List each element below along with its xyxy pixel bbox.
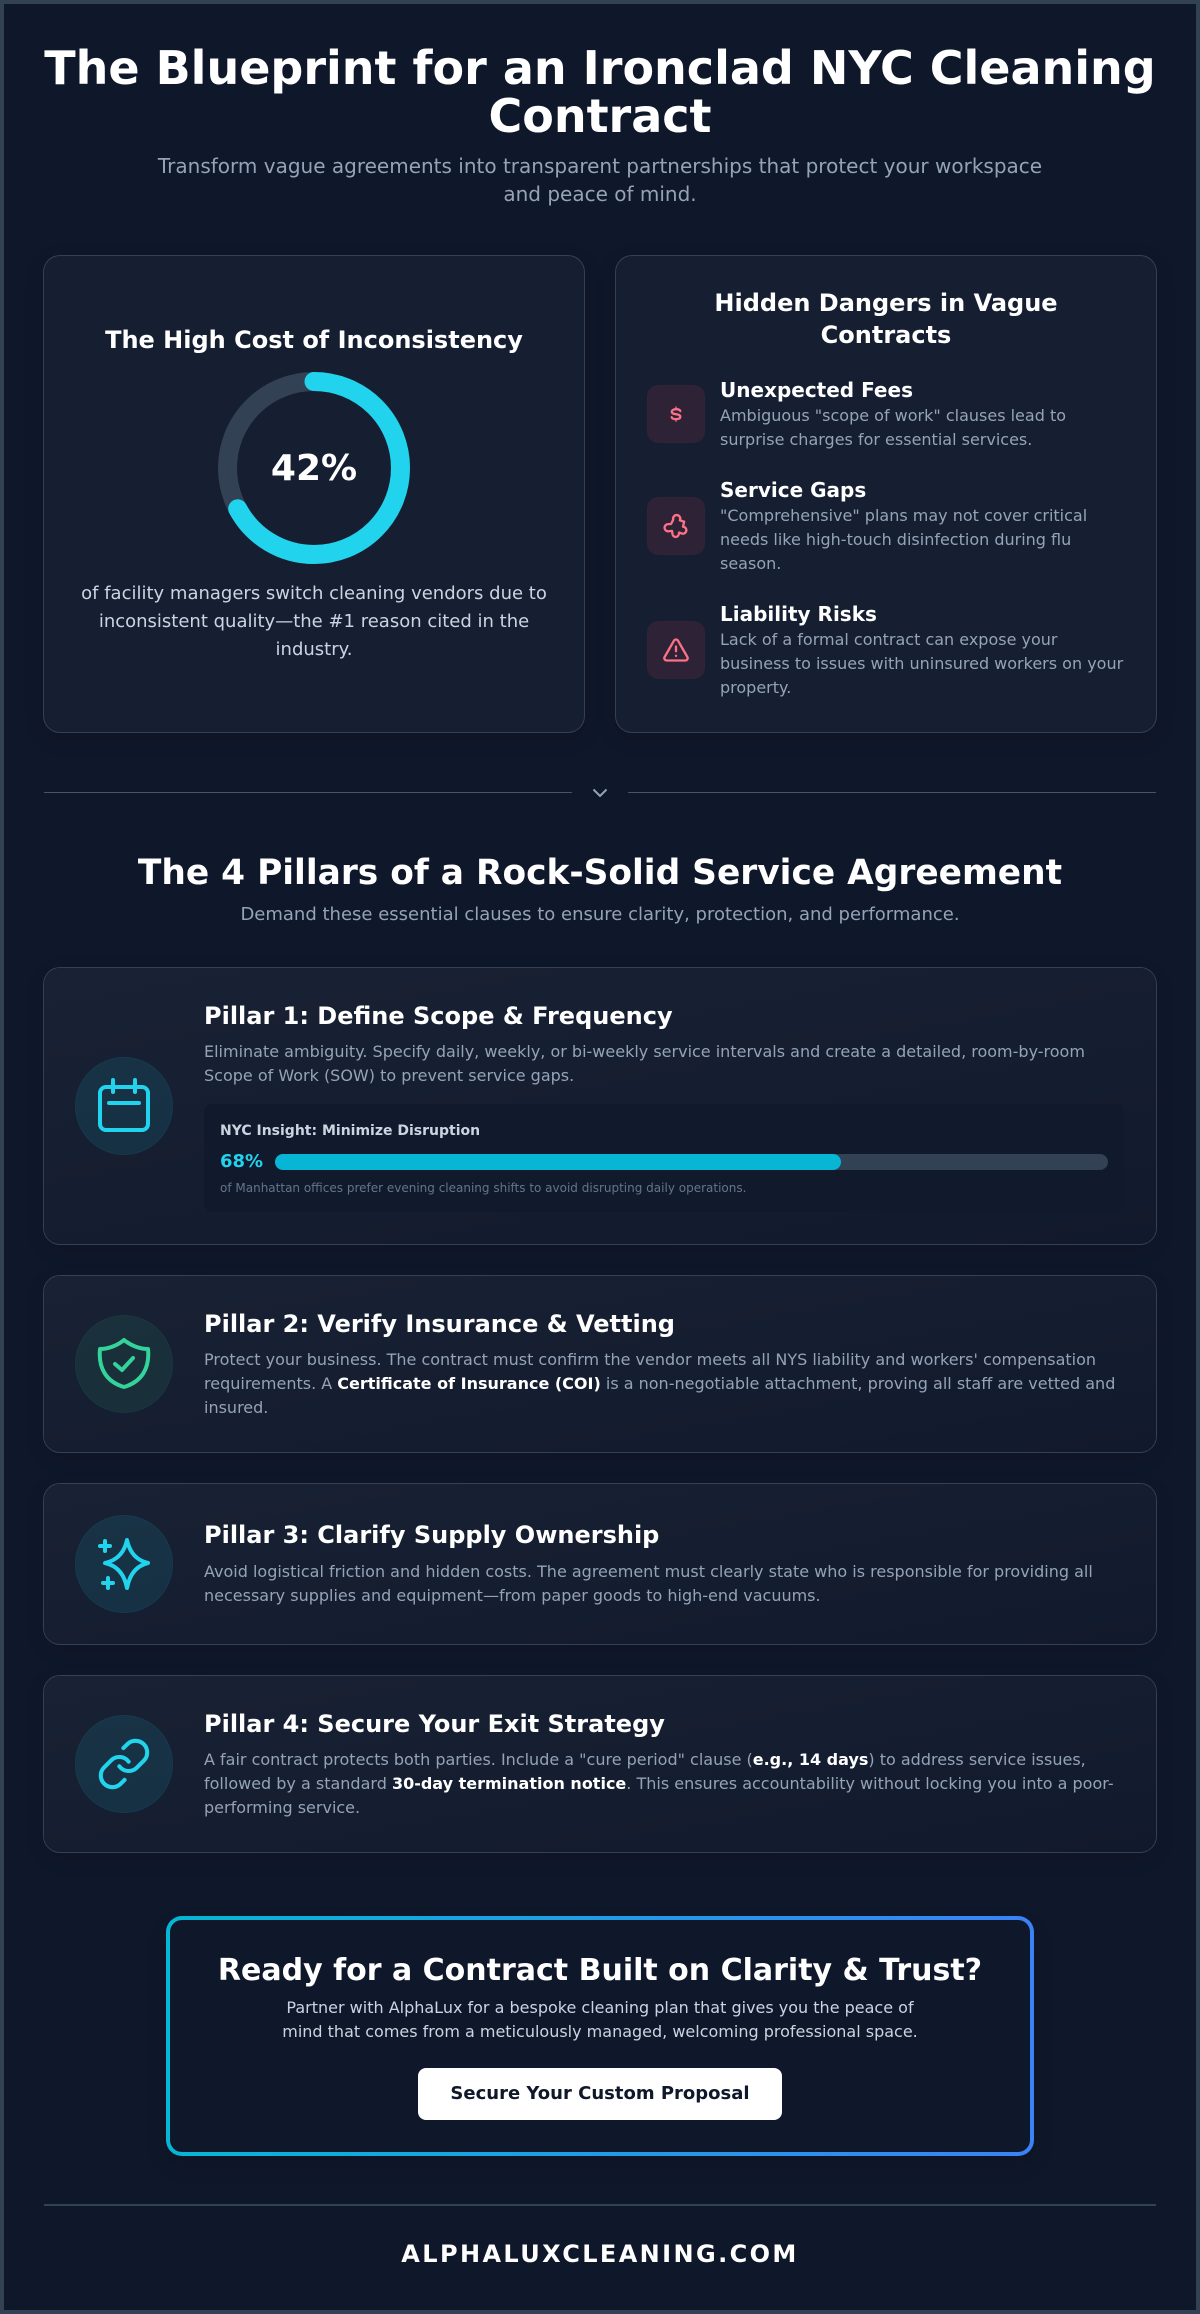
danger text: liability risks — [720, 630, 1124, 697]
title: The Blueprint for an Ironclad NYC Cleaning — [44, 41, 1156, 95]
stat description — [81, 583, 547, 660]
cta button — [418, 2068, 782, 2120]
pillar 2 heading: Pillar 2: Verify Insurance & Vetting — [204, 1310, 675, 1338]
heading: hidden dangers: Contracts — [821, 321, 951, 349]
stat description: inconsistent quality—the #1 reason cited in the — [99, 611, 529, 632]
heading: hidden dangers — [714, 289, 1058, 349]
pillar 4 text: followed by a standard 30-day termination notice. This ensures accountability without locking you into a poor- — [204, 1774, 1114, 1793]
pillar 2 text: insured. — [204, 1398, 268, 1417]
danger text: unexpected fees: Ambiguous "scope of work" clauses lead to — [720, 406, 1066, 425]
panel: pillar 3 — [44, 1484, 1156, 1644]
subtitle: Transform vague agreements into transparent partnerships that protect your workspace — [158, 154, 1042, 178]
donut chart: 42%: 42% — [271, 448, 357, 489]
danger: unexpected fees: Unexpected Fees — [720, 378, 913, 402]
icon: puzzle — [647, 497, 705, 555]
icon: link — [75, 1715, 173, 1813]
icon: dollar — [647, 385, 705, 443]
stat description: of facility managers switch cleaning vendors due to — [81, 583, 547, 604]
title: Contract — [488, 89, 712, 143]
cta text: Partner with AlphaLux for a bespoke cleaning plan that gives you the peace of — [286, 1998, 914, 2017]
danger text: service gaps: needs like high-touch disinfection during flu — [720, 530, 1071, 549]
danger text: service gaps: "Comprehensive" plans may not cover critical — [720, 506, 1087, 525]
panel: hidden dangers — [616, 256, 1156, 732]
icon: warning triangle — [647, 621, 705, 679]
panel: pillar 4 — [44, 1676, 1156, 1852]
pillar 1 heading: Pillar 1: Define Scope & Frequency — [204, 1002, 673, 1030]
panel: pillar 2 — [44, 1276, 1156, 1452]
pillar 3 text — [204, 1562, 1093, 1605]
pillar 1 text — [204, 1042, 1085, 1085]
subtitle — [158, 154, 1042, 206]
danger text: liability risks: Lack of a formal contract can expose your — [720, 630, 1058, 649]
danger text: liability risks: business to issues with uninsured workers on your — [720, 654, 1123, 673]
donut chart: 42% — [218, 372, 410, 564]
danger text: unexpected fees — [720, 406, 1066, 449]
section heading: The 4 Pillars of a Rock-Solid Service Agreement — [138, 853, 1062, 893]
pillar 4 heading: Pillar 4: Secure Your Exit Strategy — [204, 1710, 665, 1738]
danger: service gaps: Service Gaps — [720, 478, 866, 502]
pillar 2 text: requirements. A Certificate of Insurance (COI) is a non-negotiable attachment, proving all staff are vetted and — [204, 1374, 1115, 1393]
pillar 2 text: Protect your business. The contract must confirm the vendor meets all NYS liability and workers' compensation — [204, 1350, 1096, 1369]
cta text — [282, 1998, 918, 2041]
section divider with chevron — [44, 788, 1156, 798]
footer rule — [44, 2204, 1156, 2206]
pillar 2 text — [204, 1350, 1115, 1417]
heading: hidden dangers: Hidden Dangers in Vague — [714, 289, 1058, 317]
subtitle: and peace of mind. — [503, 182, 697, 206]
cta heading: Ready for a Contract Built on Clarity & Trust? — [218, 1953, 982, 1988]
cta button: Secure Your Custom Proposal — [450, 2083, 750, 2104]
callout: NYC insight — [204, 1104, 1124, 1212]
panel: pillar 1 — [44, 968, 1156, 1244]
pillar 3 heading: Pillar 3: Clarify Supply Ownership — [204, 1521, 659, 1549]
heading: high cost: The High Cost of Inconsistency — [105, 326, 523, 354]
danger: liability risks: Liability Risks — [720, 602, 877, 626]
icon: sparkles — [75, 1515, 173, 1613]
pillar 3 text: necessary supplies and equipment—from paper goods to high-end vacuums. — [204, 1586, 821, 1605]
footer website: ALPHALUXCLEANING.COM — [401, 2240, 799, 2268]
progress bar: 68% — [275, 1154, 1108, 1170]
insight caption: of Manhattan offices prefer evening cleaning shifts to avoid disrupting daily operations. — [220, 1181, 746, 1195]
pillar 1 text: Eliminate ambiguity. Specify daily, weekly, or bi-weekly service intervals and create a detailed, room-by-room — [204, 1042, 1085, 1061]
insight label: NYC Insight: Minimize Disruption — [220, 1123, 480, 1139]
icon: calendar — [75, 1057, 173, 1155]
pillar 4 text: performing service. — [204, 1798, 360, 1817]
pillar 3 text: Avoid logistical friction and hidden costs. The agreement must clearly state who is responsible for providing all — [204, 1562, 1093, 1581]
pillar 1 text: Scope of Work (SOW) to prevent service gaps. — [204, 1066, 574, 1085]
section subheading: Demand these essential clauses to ensure clarity, protection, and performance. — [240, 904, 960, 925]
panel: the high cost of inconsistency — [44, 256, 584, 732]
danger text: service gaps — [720, 506, 1087, 573]
insight percent: 68% — [220, 1151, 263, 1172]
panel: call to action — [166, 1916, 1034, 2156]
danger text: unexpected fees: surprise charges for essential services. — [720, 430, 1032, 449]
danger text: liability risks: property. — [720, 678, 791, 697]
danger text: service gaps: season. — [720, 554, 781, 573]
title — [44, 41, 1156, 143]
pillar 4 text — [204, 1750, 1114, 1817]
cta text: mind that comes from a meticulously managed, welcoming professional space. — [282, 2022, 918, 2041]
pillar 4 text: A fair contract protects both parties. Include a "cure period" clause (e.g., 14 days) to address service issues, — [204, 1750, 1086, 1769]
stat description: industry. — [276, 639, 352, 660]
icon: shield check — [75, 1315, 173, 1413]
